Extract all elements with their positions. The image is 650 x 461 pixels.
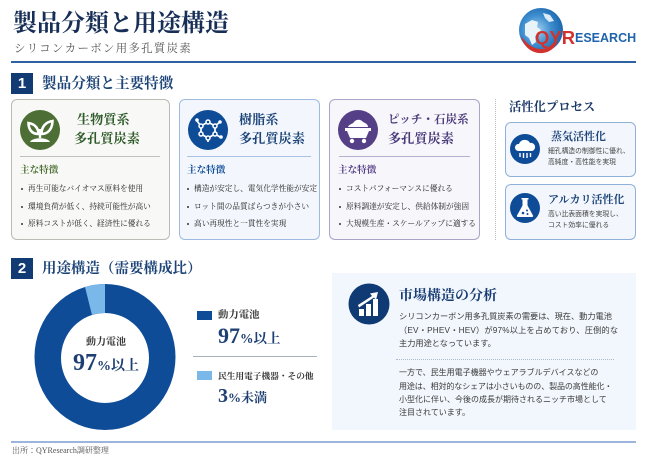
legend: power battery: 動力電池	[218, 310, 260, 321]
logo: QYResearch: QYR	[535, 27, 575, 48]
feature list: コストパフォーマンスに優れる	[346, 184, 453, 193]
features heading: 主な特徴	[20, 165, 58, 176]
panel: steam activation	[505, 122, 636, 177]
source note: 出所：QYResearch調研整理	[12, 446, 109, 455]
paragraph 2: 一方で、民生用電子機器やウェアラブルデバイスなどの	[399, 368, 598, 377]
panel: alkali activation	[505, 184, 636, 240]
section 1 badge: 1	[18, 75, 26, 92]
paragraph 2	[399, 368, 612, 417]
feature list	[21, 184, 151, 228]
paragraph 2: 用途は、相対的なシェアは小さいものの、製品の高性能化・	[399, 382, 612, 391]
box text: 高純度・高性能を実現	[548, 159, 616, 166]
panel: pitch and coal	[329, 99, 480, 240]
paragraph 2: 注目されています。	[399, 408, 470, 417]
donut chart	[34, 284, 176, 430]
card title	[239, 112, 305, 146]
feature list: ロット間の品質ばらつきが小さい	[194, 202, 309, 211]
features heading: 主な特徴	[338, 165, 376, 176]
feature list: 再生可能なバイオマス原料を使用	[28, 184, 143, 193]
feature list: 原料コストが低く、経済性に優れる	[28, 219, 151, 228]
section 2 badge	[11, 258, 33, 279]
paragraph 1	[399, 312, 618, 348]
box text	[548, 210, 623, 229]
donut center label: 動力電池	[86, 337, 126, 348]
section 2 heading: 用途構造（需要構成比）	[42, 261, 202, 277]
box text	[548, 147, 630, 166]
card title: 多孔質炭素	[239, 131, 305, 146]
feature list	[187, 184, 317, 228]
legend: consumer electronics: 3%未満	[218, 385, 267, 407]
box title: 蒸気活性化	[551, 131, 606, 143]
donut center label	[73, 336, 139, 376]
feature list: 環境負荷が低く、持続可能性が高い	[28, 202, 151, 211]
paragraph 1: 主力用途となっています。	[399, 339, 496, 348]
section 2 badge: 2	[18, 260, 26, 277]
legend: consumer electronics: 民生用電子機器・その他	[218, 371, 314, 381]
card title: 樹脂系	[239, 112, 279, 127]
legend: power battery: 97%以上	[218, 323, 280, 348]
icon: steam cloud	[510, 134, 540, 164]
donut center label: 97%以上	[73, 350, 139, 376]
card title: 生物質系	[77, 112, 130, 127]
feature list: 大規模生産・スケールアップに適する	[346, 219, 476, 228]
icon: flask	[510, 193, 540, 223]
feature list: 構造が安定し、電気化学性能が安定	[194, 184, 317, 193]
legend: power battery	[197, 309, 280, 348]
legend: consumer electronics	[197, 371, 314, 407]
panel: resin	[179, 99, 320, 240]
feature list: 原料調達が安定し、供給体制が強固	[346, 202, 469, 211]
card title	[74, 112, 140, 146]
card title: 多孔質炭素	[74, 131, 140, 146]
activation heading: 活性化プロセス	[509, 100, 595, 114]
icon: growth chart	[348, 284, 390, 324]
card title	[388, 113, 469, 146]
paragraph 1: （EV・PHEV・HEV）が97%以上を占めており、圧倒的な	[399, 326, 618, 335]
section 1 badge	[11, 73, 33, 94]
box text: 高い比表面積を実現し、	[548, 211, 623, 218]
features heading: 主な特徴	[187, 165, 225, 176]
card title: ピッチ・石炭系	[388, 113, 469, 126]
panel title: 市場構造の分析	[399, 289, 497, 304]
icon: sprout	[20, 110, 60, 150]
icon: mine cart	[338, 110, 378, 150]
card title: 多孔質炭素	[388, 131, 454, 146]
feature list: 高い再現性と一貫性を実現	[194, 219, 286, 228]
title: 製品分類と用途構造	[13, 11, 229, 37]
panel: market analysis	[332, 273, 636, 430]
icon: molecule	[188, 110, 228, 150]
panel: biomass	[11, 99, 170, 240]
section 1 heading: 製品分類と主要特徴	[42, 76, 173, 92]
box text: コスト効率に優れる	[548, 222, 609, 229]
feature list	[339, 184, 476, 228]
box text: 細孔構造の制御性に優れ、	[548, 148, 630, 155]
box title: アルカリ活性化	[548, 194, 625, 206]
paragraph 1: シリコンカーボン用多孔質炭素の需要は、現在、動力電池	[399, 312, 612, 321]
paragraph 2: 小型化に伴い、今後の成長が期待されるニッチ市場として	[399, 395, 607, 404]
subtitle: シリコンカーボン用多孔質炭素	[14, 43, 192, 55]
logo: QYResearch: ESEARCH	[575, 31, 636, 45]
logo: QYResearch	[519, 8, 636, 54]
